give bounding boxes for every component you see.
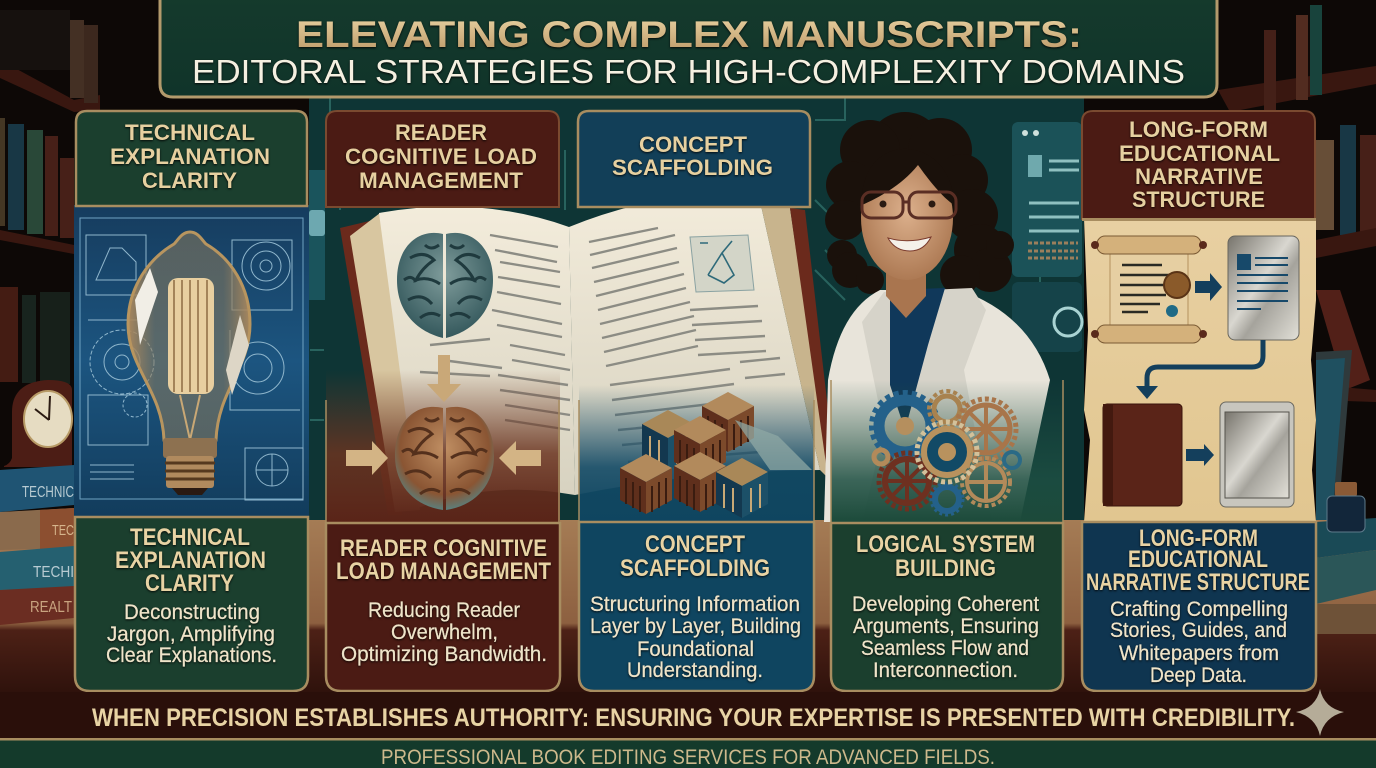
- card: long-form educational narrative structure: NARRATIVE STRUCTURE: [1086, 569, 1310, 596]
- card: technical explanation clarity: [75, 517, 308, 691]
- card: logical system building: LOGICAL SYSTEM: [856, 531, 1035, 558]
- card: concept scaffolding: Layer by Layer, Building: [590, 615, 801, 638]
- card: concept scaffolding: Understanding.: [627, 659, 763, 682]
- mantel clock: [4, 380, 72, 467]
- card: reader cognitive load management: READER COGNITIVE: [340, 535, 547, 562]
- card: long-form educational narrative structure: Deep Data.: [1150, 664, 1247, 687]
- card: technical explanation clarity: CLARITY: [145, 570, 234, 597]
- icon: leather book: [1103, 404, 1182, 506]
- card: concept scaffolding: [579, 522, 814, 691]
- arrow: squeeze from left: [346, 441, 388, 475]
- gradient: logic panel image overlay: [831, 380, 1063, 522]
- card: technical explanation clarity: EXPLANATION: [115, 547, 266, 574]
- gradient: reader panel image overlay: [326, 370, 560, 522]
- stacked books: left: TEC: [52, 522, 74, 539]
- stacked books: left: REALT: [30, 599, 72, 616]
- header: reader cognitive load management: MANAGEMENT: [359, 168, 524, 193]
- header: concept scaffolding: SCAFFOLDING: [612, 155, 773, 180]
- header: long-form educational narrative structure: [1082, 111, 1316, 221]
- card: technical explanation clarity: Clear Explanations.: [106, 644, 277, 667]
- page text lines: [420, 235, 570, 430]
- icon: scroll with seal: [1091, 236, 1207, 343]
- header: long-form educational narrative structure: NARRATIVE: [1135, 164, 1263, 189]
- title banner: ELEVATING COMPLEX MANUSCRIPTS:: [296, 14, 1082, 55]
- card: logical system building: BUILDING: [895, 555, 996, 582]
- icon: pencil sketch card: [690, 235, 754, 292]
- card: reader cognitive load management: LOAD MANAGEMENT: [336, 558, 551, 585]
- card: logical system building: Interconnection.: [873, 659, 1018, 682]
- card: concept scaffolding: CONCEPT: [645, 531, 745, 558]
- card: reader cognitive load management: Optimizing Bandwidth.: [341, 643, 547, 666]
- header: technical explanation clarity: [76, 111, 307, 206]
- arrow: book to tablet: [1186, 444, 1214, 466]
- portrait: editor: [824, 112, 1050, 522]
- card: concept scaffolding: SCAFFOLDING: [620, 555, 770, 582]
- light bulb: [128, 232, 250, 495]
- header: technical explanation clarity: EXPLANATION: [110, 144, 270, 169]
- open book: [340, 192, 835, 515]
- arrow: brain down: [427, 355, 461, 402]
- icon: four-point star: [1296, 689, 1344, 736]
- header: concept scaffolding: CONCEPT: [639, 132, 748, 157]
- icon: optimized warm brain: [395, 407, 494, 510]
- header: technical explanation clarity: TECHNICAL: [125, 120, 255, 145]
- tagline band: [0, 692, 1376, 739]
- icon: ink bottle: [1327, 482, 1365, 532]
- stacked books: left: TECHNIC: [22, 484, 74, 501]
- icon: isometric building blocks: [620, 392, 768, 518]
- card: logical system building: Developing Coherent: [852, 593, 1039, 616]
- header: long-form educational narrative structure: STRUCTURE: [1132, 187, 1265, 212]
- card: logical system building: [831, 523, 1063, 691]
- card: concept scaffolding: Foundational: [637, 638, 754, 661]
- card: reader cognitive load management: [326, 523, 560, 691]
- card: technical explanation clarity: TECHNICAL: [130, 524, 250, 551]
- card: long-form educational narrative structure: EDUCATIONAL: [1128, 546, 1268, 573]
- gradient: scaffolding panel image overlay: [579, 385, 814, 522]
- curly hair: [825, 112, 1014, 295]
- card: technical explanation clarity: Deconstructing: [124, 601, 260, 624]
- desk surface: [0, 520, 1376, 692]
- icon: overloaded blue-green brain: [397, 233, 493, 338]
- icon: metal tablet: [1220, 402, 1294, 507]
- bookshelf: left: [0, 10, 100, 384]
- card: logical system building: Seamless Flow and: [861, 637, 1029, 660]
- card: concept scaffolding: Structuring Information: [590, 593, 800, 616]
- card: technical explanation clarity: Jargon, Amplifying: [107, 623, 275, 646]
- card: long-form educational narrative structure: LONG-FORM: [1139, 525, 1258, 552]
- card: reader cognitive load management: Overwhelm,: [391, 621, 498, 644]
- header: reader cognitive load management: [326, 111, 559, 207]
- card: long-form educational narrative structure: Whitepapers from: [1119, 642, 1279, 665]
- tablet held in hand: [735, 420, 812, 470]
- header: concept scaffolding: [578, 111, 810, 207]
- card: long-form educational narrative structure: Stories, Guides, and: [1110, 619, 1287, 642]
- title banner: EDITORAL STRATEGIES FOR HIGH-COMPLEXITY DOMAINS: [192, 53, 1185, 90]
- stacked books: left: TECHI: [33, 564, 74, 581]
- bookshelf: right: [1218, 5, 1376, 402]
- laptop and stacked books: right: [1316, 350, 1376, 634]
- panel outline: logic image: [831, 380, 1063, 522]
- card: long-form educational narrative structure: Crafting Compelling: [1110, 598, 1288, 621]
- footer band: [0, 738, 1376, 768]
- header: reader cognitive load management: COGNITIVE LOAD: [345, 144, 537, 169]
- icon: interlocking gears: [872, 391, 1020, 515]
- header: reader cognitive load management: READER: [395, 120, 487, 145]
- arrow: connector to book: [1136, 340, 1263, 399]
- stacked books: left: [0, 465, 74, 625]
- title banner: [160, 0, 1217, 97]
- header: long-form educational narrative structure: EDUCATIONAL: [1119, 141, 1280, 166]
- panel image: blueprint with light bulb: [74, 205, 309, 517]
- header: long-form educational narrative structure: LONG-FORM: [1129, 117, 1268, 142]
- arrow: squeeze from right: [499, 441, 541, 475]
- panel image: parchment publishing flow: [1084, 218, 1316, 522]
- card: reader cognitive load management: Reducing Reader: [368, 599, 520, 622]
- panel outline: reader image: [326, 400, 559, 522]
- panel outline: scaffolding image: [579, 400, 814, 522]
- card: logical system building: Arguments, Ensuring: [853, 615, 1039, 638]
- header: technical explanation clarity: CLARITY: [142, 168, 237, 193]
- card: long-form educational narrative structure: [1082, 522, 1316, 691]
- blueprint drawings: [86, 235, 303, 500]
- arrow: scroll to tablet: [1195, 273, 1222, 301]
- icon: e-reader tablet: [1228, 236, 1299, 340]
